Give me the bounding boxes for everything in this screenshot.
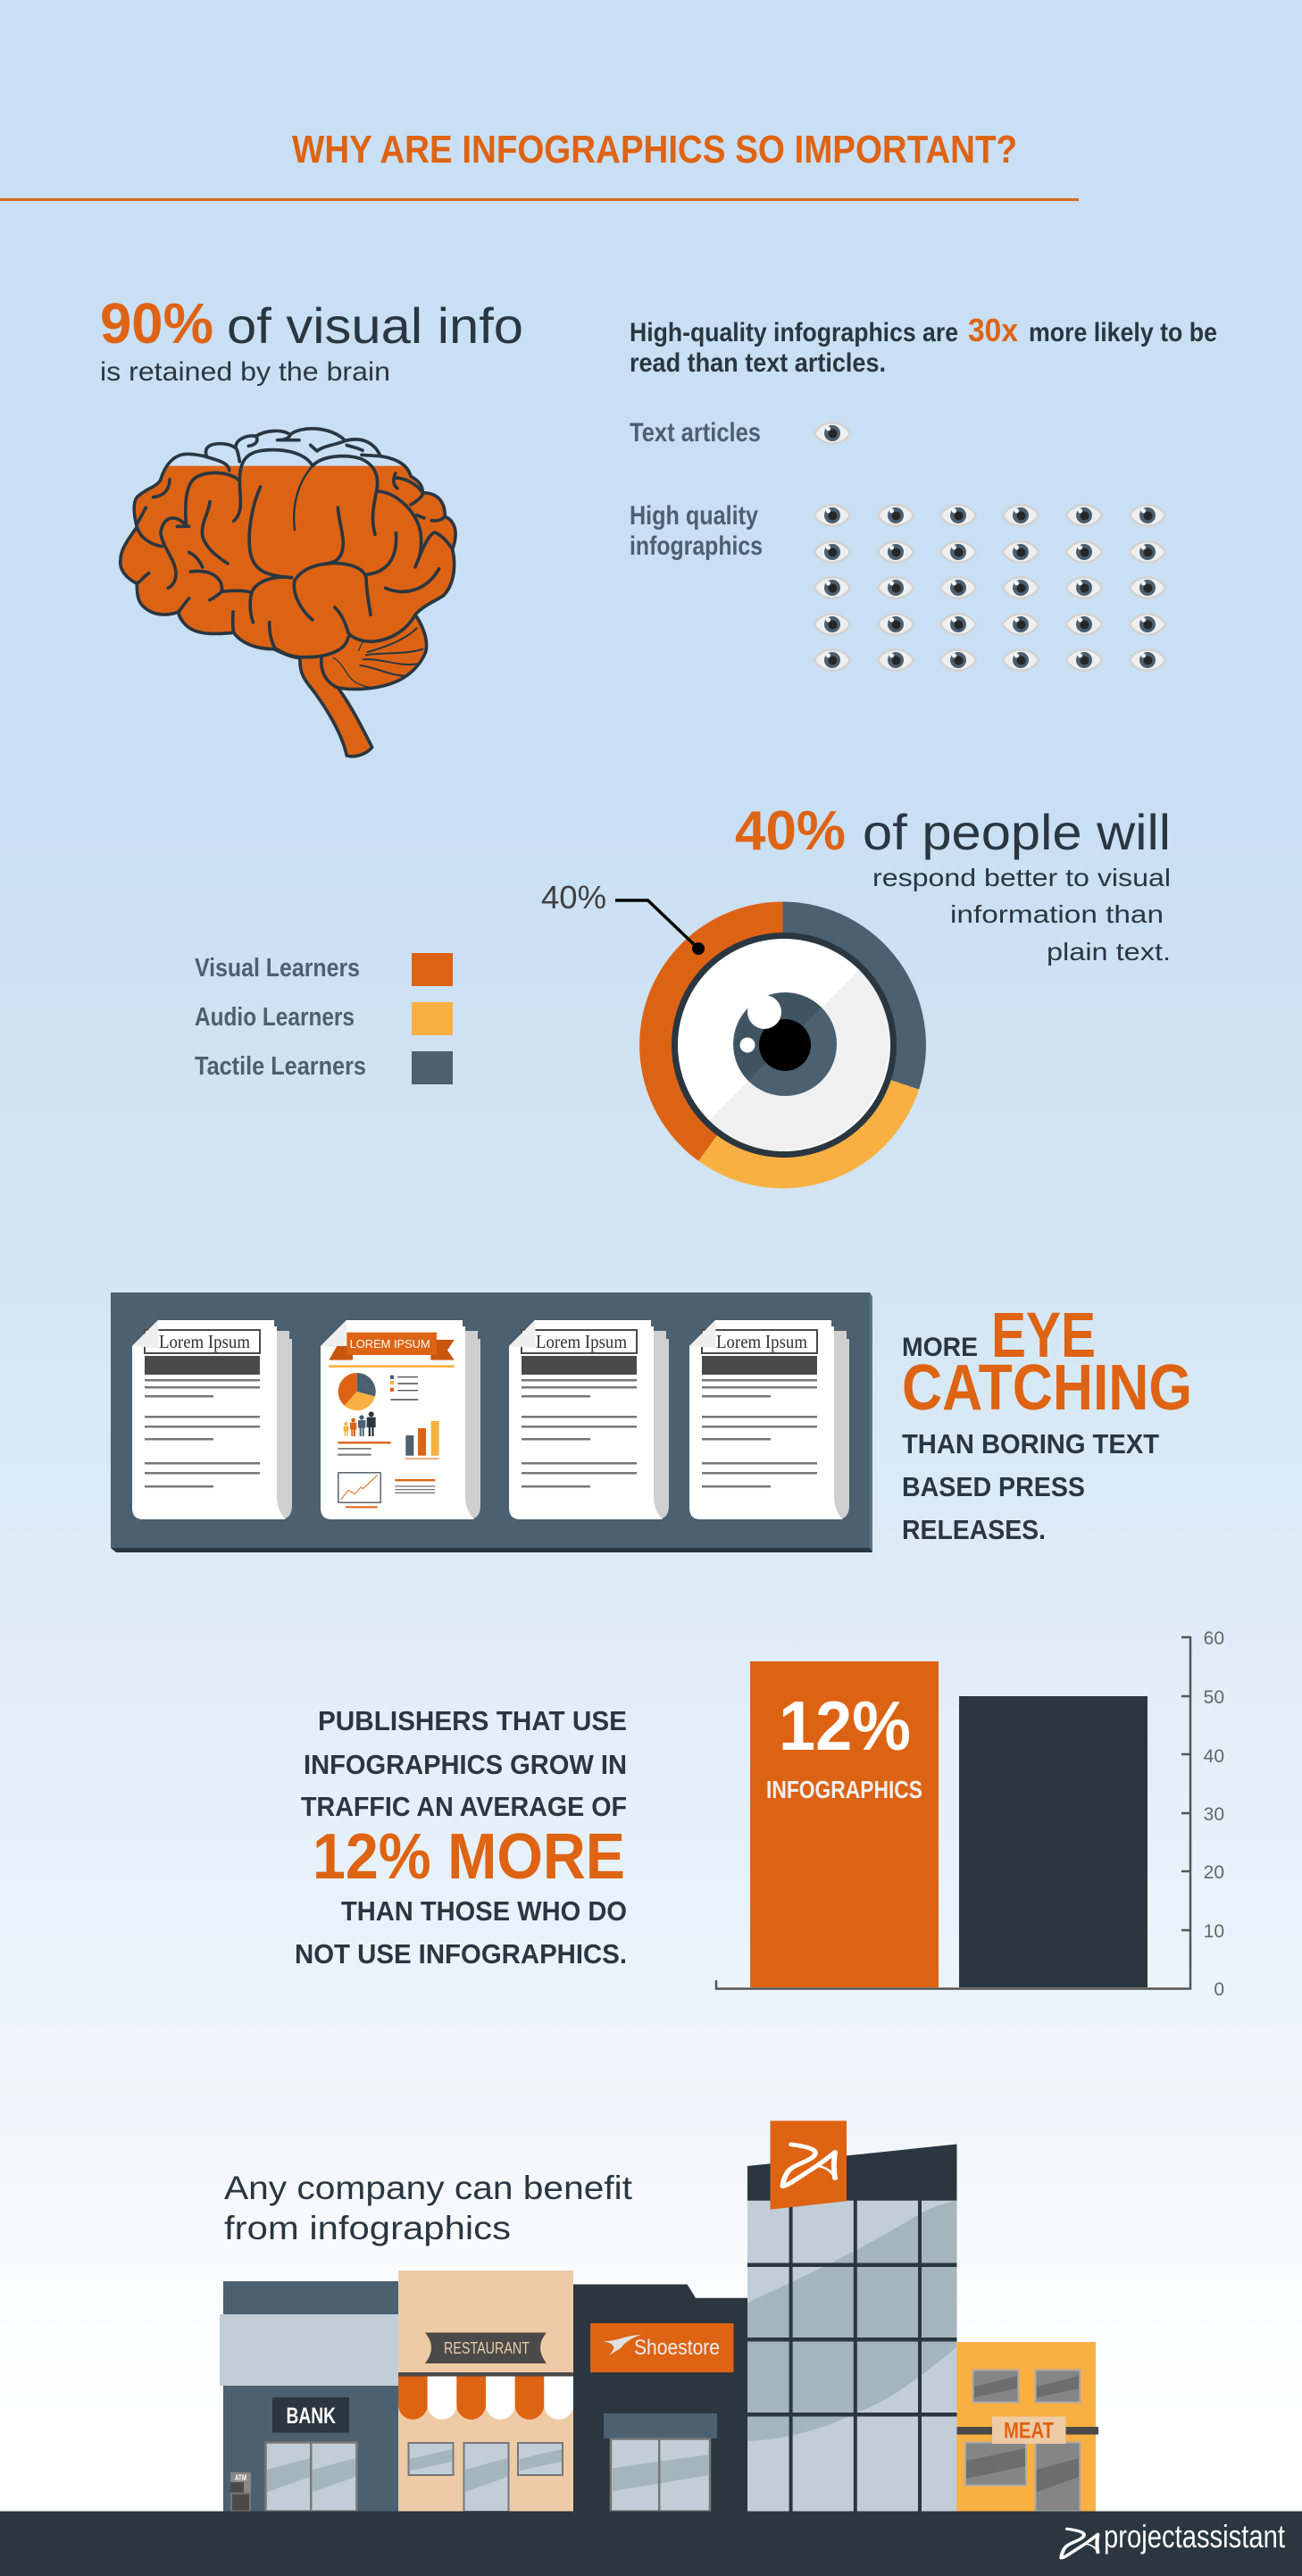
sign: shoestore: Shoestore bbox=[634, 2336, 720, 2360]
ground: street footer bbox=[0, 2512, 1302, 2576]
heading: any company can benefit bbox=[224, 2170, 633, 2246]
chart: traffic bars bbox=[716, 1628, 1224, 2000]
text block: more eye catching: BASED PRESS bbox=[902, 1471, 1085, 1502]
building: shoestore bbox=[573, 2285, 747, 2512]
icon: brain filled 90% bbox=[121, 429, 455, 757]
sign: bank bbox=[272, 2397, 349, 2433]
icon grid: thirty eyes bbox=[814, 505, 1165, 671]
axis: 10 bbox=[1204, 1921, 1224, 1942]
panel: brain stat bbox=[100, 291, 523, 757]
logo: projectassistant bbox=[1061, 2518, 1285, 2558]
building: glass tower bbox=[747, 2120, 957, 2512]
callout: 40%: 40% bbox=[541, 879, 606, 916]
text block: publishers traffic: NOT USE INFOGRAPHICS. bbox=[295, 1938, 627, 1970]
text block: publishers traffic bbox=[295, 1705, 627, 1970]
door: bank bbox=[266, 2442, 357, 2512]
label: high quality infographics: infographics bbox=[630, 531, 763, 561]
door: shoestore bbox=[611, 2438, 710, 2512]
heading: 90% of visual info: of visual info bbox=[227, 297, 523, 354]
text: high-quality infographics: High-quality infographics are bbox=[630, 318, 958, 347]
ribbon: LOREM IPSUM bbox=[350, 1337, 430, 1351]
bar: infographics bbox=[750, 1661, 939, 1987]
bar: infographics: INFOGRAPHICS bbox=[766, 1776, 922, 1803]
mini legend bbox=[390, 1376, 418, 1401]
chart: donut with eye bbox=[639, 902, 926, 1188]
document: plain text 1: Lorem Ipsum bbox=[159, 1331, 250, 1352]
text: high-quality infographics: read than text articles. bbox=[630, 348, 886, 378]
title: WHY ARE INFOGRAPHICS SO IMPORTANT? bbox=[292, 128, 1017, 171]
document: infographic bbox=[321, 1320, 480, 1519]
text block: more eye catching bbox=[902, 1301, 1192, 1545]
panel: 40% of people bbox=[195, 800, 1171, 1188]
text: respond better: respond better to visual bbox=[872, 864, 1171, 891]
label: high quality infographics bbox=[630, 501, 763, 561]
sign: shoestore bbox=[590, 2323, 734, 2372]
document: plain text 3: Lorem Ipsum bbox=[716, 1331, 807, 1352]
heading: 40% of people will bbox=[735, 800, 1171, 862]
text: respond better: information than bbox=[950, 900, 1164, 928]
heading: 40% of people will: of people will bbox=[863, 804, 1171, 860]
ribbon bbox=[329, 1333, 455, 1360]
text block: publishers traffic: THAN THOSE WHO DO bbox=[341, 1895, 627, 1927]
axis: 30 bbox=[1204, 1804, 1224, 1825]
bar: infographics: 12% bbox=[779, 1686, 911, 1765]
heading: 90% of visual info bbox=[100, 291, 523, 355]
text: high-quality infographics: 30x bbox=[968, 312, 1018, 348]
text block: more eye catching: THAN BORING TEXT bbox=[902, 1428, 1159, 1459]
awning: striped bbox=[398, 2376, 573, 2420]
axis bbox=[716, 1628, 1224, 2000]
label: high quality infographics: High quality bbox=[630, 501, 758, 531]
text: is retained by the brain: is retained by the brain bbox=[100, 357, 390, 387]
bar: others bbox=[959, 1696, 1148, 1987]
windows and door: meat shop bbox=[965, 2371, 1081, 2512]
axis: 40 bbox=[1204, 1746, 1224, 1767]
axis: 20 bbox=[1204, 1862, 1224, 1883]
atm: ATM bbox=[235, 2473, 246, 2482]
document: plain text 1 bbox=[132, 1320, 292, 1519]
text block: publishers traffic: PUBLISHERS THAT USE bbox=[318, 1705, 627, 1736]
sign: restaurant bbox=[425, 2333, 547, 2363]
text block: more eye catching: CATCHING bbox=[902, 1352, 1192, 1424]
icon: single eye bbox=[814, 422, 850, 444]
text block: publishers traffic: TRAFFIC AN AVERAGE OF bbox=[301, 1791, 627, 1822]
legend: learner types: Tactile Learners bbox=[195, 1052, 366, 1081]
text block: more eye catching: RELEASES. bbox=[902, 1514, 1046, 1545]
axis: 60 bbox=[1204, 1628, 1224, 1649]
document: plain text 2: Lorem Ipsum bbox=[536, 1331, 627, 1352]
sign: restaurant: RESTAURANT bbox=[444, 2339, 530, 2357]
text block: publishers traffic: INFOGRAPHICS GROW IN bbox=[304, 1749, 627, 1780]
legend: learner types bbox=[195, 953, 453, 1084]
panel: press release board bbox=[111, 1292, 872, 1552]
text: high-quality infographics: more likely to be bbox=[1029, 318, 1217, 347]
text: respond better: plain text. bbox=[1047, 938, 1171, 966]
text block: publishers traffic: 12% MORE bbox=[313, 1821, 625, 1893]
mini pie chart bbox=[338, 1373, 376, 1410]
mini bar chart bbox=[405, 1421, 439, 1459]
document: plain text 3 bbox=[689, 1320, 849, 1519]
legend: learner types: Visual Learners bbox=[195, 954, 360, 983]
sign: meat: MEAT bbox=[1004, 2419, 1054, 2444]
building: bank bbox=[220, 2281, 398, 2512]
mini people bbox=[344, 1411, 376, 1436]
text: respond better bbox=[872, 864, 1171, 966]
heading: 90% of visual info: 90% bbox=[100, 291, 213, 355]
text block: more eye catching: EYE bbox=[991, 1301, 1096, 1371]
label: text articles: Text articles bbox=[630, 418, 761, 447]
panel: 30x more likely bbox=[630, 312, 1217, 671]
document: plain text 2 bbox=[509, 1320, 669, 1519]
building: restaurant bbox=[398, 2271, 573, 2512]
axis: 0 bbox=[1214, 1979, 1224, 2000]
text: high-quality infographics bbox=[630, 312, 1217, 378]
heading: any company can benefit: from infographics bbox=[224, 2210, 511, 2246]
flag: logo bbox=[770, 2120, 847, 2210]
text block: more eye catching: MORE bbox=[902, 1333, 978, 1362]
windows and door: restaurant bbox=[409, 2443, 563, 2512]
mini line chart bbox=[338, 1473, 380, 1502]
building: meat shop bbox=[957, 2342, 1098, 2512]
heading: 40% of people will: 40% bbox=[735, 800, 846, 862]
axis: 50 bbox=[1204, 1687, 1224, 1708]
sign: bank: BANK bbox=[286, 2404, 336, 2429]
atm bbox=[230, 2472, 251, 2512]
callout: 40% bbox=[541, 879, 705, 955]
legend: learner types: Audio Learners bbox=[195, 1003, 355, 1032]
heading: any company can benefit: Any company can benefit bbox=[224, 2170, 633, 2206]
